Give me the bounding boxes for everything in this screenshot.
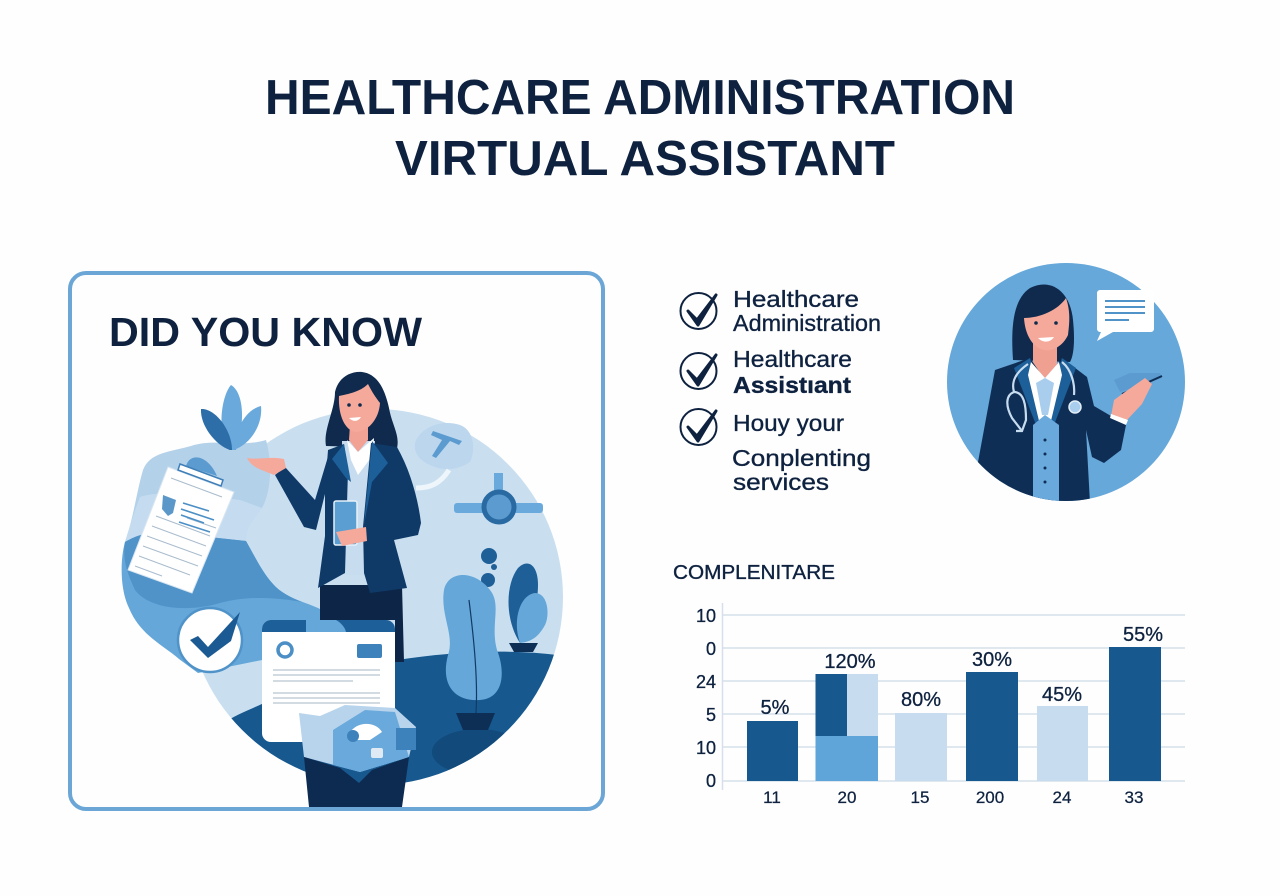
dark ground shadow [432,730,504,770]
stethoscope [1007,362,1074,431]
icon: folder with images [299,705,416,772]
dark ground [231,652,554,783]
illustration: woman with healthcare documents [122,372,565,807]
title: HEALTHCARE ADMINISTRATION [265,71,1015,125]
hand with device [1110,373,1162,425]
y axis labels: 0 [706,639,716,659]
heading: did you know: DID YOU KNOW [109,309,422,355]
y axis labels [696,606,716,791]
y axis labels: 0 [706,771,716,791]
speech bubble [1097,290,1154,341]
icon: small potted plant [508,563,548,652]
icon: large potted plant [443,575,502,730]
left blue wash [122,531,346,673]
neck and face [1033,340,1057,378]
left darker wash [124,531,302,608]
blouse and vest [1028,362,1062,425]
y axis labels: 10 [696,738,716,758]
woman [247,372,421,662]
bar 6 [1109,647,1161,781]
hair [326,372,398,448]
x axis labels: 11 [763,788,781,807]
phone [334,501,357,545]
holding hand [336,527,367,546]
icon: crosshair gauge [454,473,543,522]
item: healthcare assistant: Healthcare [733,346,852,372]
checklist [680,286,881,495]
grid lines [722,603,1185,790]
left arm [275,450,330,530]
y axis labels: 24 [696,672,716,692]
title [265,71,1015,186]
shirt [342,441,375,575]
item: healthcare assistant: Assistıant [733,372,851,398]
x axis labels: 200 [976,788,1004,807]
icon: clipboard [128,457,234,593]
hand [247,458,286,475]
bar 2 stacked [816,674,878,781]
illustration: assistant with stethoscope [947,263,1185,505]
bubbles [481,548,497,587]
value labels: 30% [972,649,1012,671]
icon: document card [262,620,395,742]
bar 1 [747,721,798,781]
item: houy your [680,409,844,445]
bar 4 [966,672,1018,781]
text: conplenting services: Conplenting [732,445,871,471]
y axis labels: 10 [696,606,716,626]
x axis labels: 20 [838,788,856,807]
pants [320,585,404,662]
value labels: 5% [761,697,790,719]
neck and face [349,425,368,452]
icon: check badge [178,608,242,672]
item: healthcare administration: Healthcare [733,286,859,312]
panel: did you know [70,273,603,809]
lapels [1014,358,1039,423]
item: healthcare administration [680,286,881,336]
x axis labels: 15 [911,788,929,807]
x axis labels: 33 [1125,788,1143,807]
text: conplenting services [732,445,871,495]
icon: plant leaves [201,385,261,450]
folder pocket [304,757,409,807]
bar 3 [895,713,947,781]
value labels: 45% [1042,684,1082,706]
title: VIRTUAL ASSISTANT [395,132,895,186]
portrait circle [947,263,1185,501]
hair [1012,285,1074,362]
item: houy your: Houy your [733,410,844,436]
bar chart [696,603,1185,807]
collar [347,438,374,475]
value labels: 55% [1123,624,1163,646]
value labels: 120% [824,651,876,673]
item: healthcare administration: Administration [733,310,881,336]
y axis labels: 5 [706,705,716,725]
bar 5 [1037,706,1088,781]
icon: plane bubble [415,423,473,488]
item: healthcare assistant [680,346,852,398]
background circle [187,409,563,785]
left light blob [125,440,270,542]
jacket and sleeve [978,358,1127,503]
value labels [761,624,1163,719]
text: conplenting services: services [733,469,829,495]
lower step of light blob [125,494,262,542]
jacket [318,443,421,593]
x axis labels: 24 [1053,788,1071,807]
x axis labels [763,788,1143,807]
value labels: 80% [901,689,941,711]
chart heading: COMPLENITARE [673,562,835,584]
